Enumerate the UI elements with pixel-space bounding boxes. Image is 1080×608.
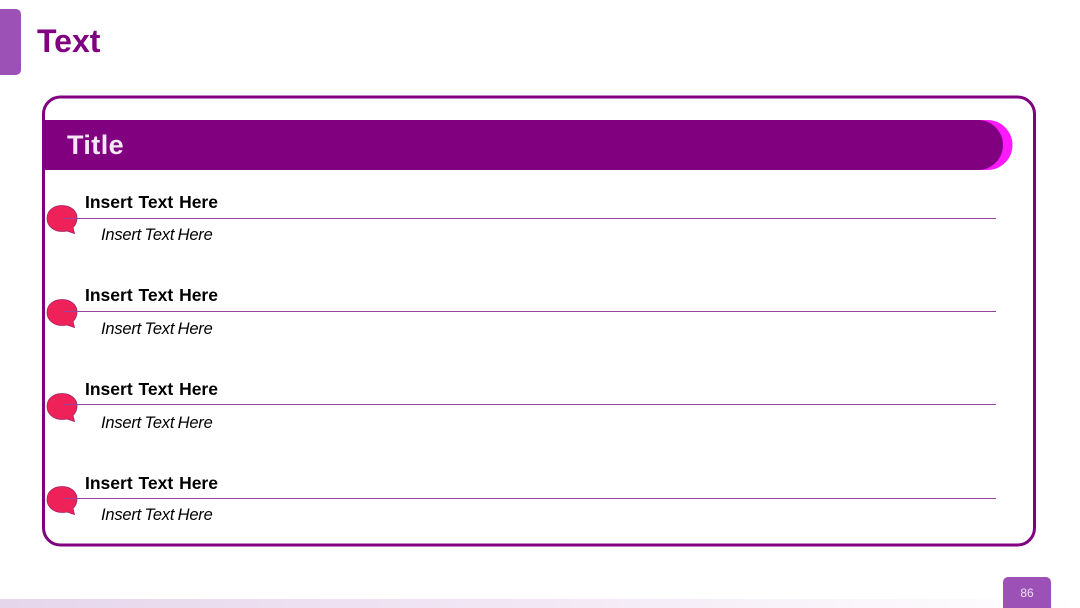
sub text: Insert Text Here bbox=[101, 320, 213, 338]
sub text: Insert Text Here bbox=[101, 226, 213, 244]
sub text: Insert Text Here bbox=[101, 414, 213, 432]
title accent tab bbox=[0, 9, 21, 75]
list item 1 bbox=[46, 192, 996, 244]
divider bbox=[64, 404, 996, 405]
divider bbox=[64, 218, 996, 219]
icon: speech bubble bbox=[46, 486, 78, 516]
icon: speech bubble bbox=[46, 299, 78, 328]
list item 2 bbox=[46, 285, 996, 338]
list item 4 bbox=[46, 473, 996, 524]
list item 3 bbox=[46, 379, 996, 432]
page number badge: 86 bbox=[1020, 586, 1034, 600]
panel: content card bbox=[42, 96, 1036, 546]
footer gradient band bbox=[0, 599, 1080, 608]
heading: Insert Text Here bbox=[85, 379, 218, 399]
banner title: Title bbox=[67, 130, 124, 160]
divider bbox=[64, 311, 996, 312]
heading: Insert Text Here bbox=[85, 285, 218, 305]
heading: Insert Text Here bbox=[85, 473, 218, 493]
icon: speech bubble bbox=[46, 205, 78, 234]
icon: speech bubble bbox=[46, 393, 78, 422]
sub text: Insert Text Here bbox=[101, 506, 213, 524]
page title: Text bbox=[37, 23, 100, 59]
divider bbox=[64, 498, 996, 499]
heading: Insert Text Here bbox=[85, 192, 218, 212]
page number badge bbox=[1003, 577, 1051, 608]
